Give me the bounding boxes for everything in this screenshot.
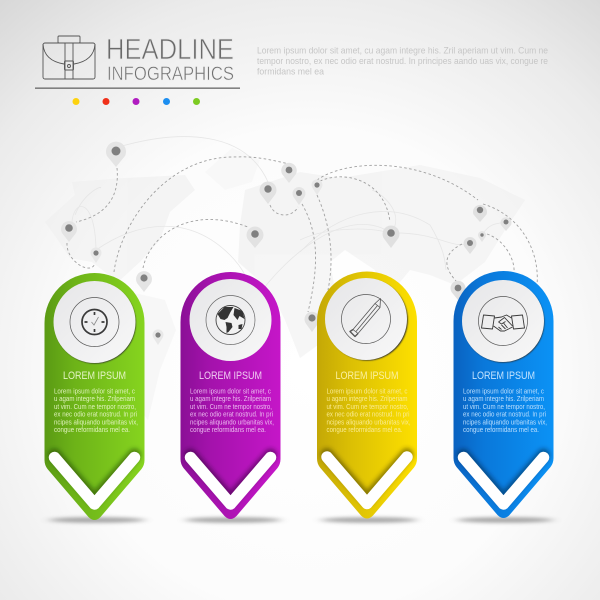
card text: ut vim. Cum ne tempor nostro, — [54, 403, 136, 411]
pin — [304, 312, 320, 332]
card heading: LOREM IPSUM — [336, 370, 398, 382]
card text: ut vim. Cum ne tempor nostro, — [463, 403, 545, 411]
icon: chevron — [54, 458, 134, 504]
card text: ut vim. Cum ne tempor nostro, — [326, 403, 409, 411]
intro text block: Lorem ipsum dolor sit amet, cu agam integre his. Zril aperiam ut vim. Cum ne — [257, 44, 548, 56]
panel: green card — [44, 273, 144, 520]
card text: ncipes aliquando urbanitas vix, — [54, 418, 138, 426]
card text: u agam integre his. Zrilperiam — [326, 395, 408, 403]
card text: ncipes aliquando urbanitas vix, — [326, 418, 411, 426]
icon: handshake — [482, 315, 524, 331]
pin — [382, 226, 400, 248]
world map background — [45, 148, 525, 420]
panel: purple card — [180, 272, 280, 519]
card text: Lorem ipsum dolor sit amet, c — [463, 388, 544, 396]
title: headline: HEADLINE — [106, 34, 234, 66]
card heading: LOREM IPSUM — [199, 370, 262, 382]
pin — [90, 247, 102, 263]
colour dots — [72, 98, 200, 105]
subtitle: infographics: INFOGRAPHICS — [107, 63, 234, 85]
panel: yellow card — [317, 272, 417, 518]
card text: ex nec odio erat nostrud. In pri — [54, 411, 137, 419]
pin — [61, 221, 77, 242]
icon: globe — [216, 306, 245, 334]
icon: pencil — [350, 298, 380, 336]
pin — [312, 179, 323, 195]
card text — [326, 388, 411, 434]
pin — [293, 187, 306, 205]
card text: ex nec odio erat nostrud. In pri — [326, 411, 410, 419]
pin — [281, 163, 297, 183]
icon: chevron — [190, 458, 270, 504]
pin — [246, 226, 264, 248]
intro text block — [257, 44, 548, 76]
card text: u agam integre his. Zrilperiam — [463, 395, 544, 403]
card text: Lorem ipsum dolor sit amet, c — [54, 388, 135, 396]
pin — [450, 281, 466, 300]
card text: Lorem ipsum dolor sit amet, c — [190, 388, 271, 396]
card text: ex nec odio erat nostrud. In pri — [190, 411, 273, 419]
icon: briefcase — [43, 36, 95, 79]
intro text block: tempor nostro, ex nec odio erat nostrud. In principes aando uas vix, congue re — [257, 55, 548, 66]
pin — [136, 271, 152, 292]
card text: congue reformidans mel ea. — [326, 426, 403, 434]
map dashed routes — [67, 157, 537, 312]
pin — [106, 142, 126, 167]
card heading: LOREM IPSUM — [472, 370, 535, 382]
panel: blue card — [454, 271, 554, 518]
card heading: LOREM IPSUM — [63, 370, 126, 382]
pin — [260, 182, 276, 204]
card text: ncipes aliquando urbanitas vix, — [463, 418, 547, 426]
card text: ut vim. Cum ne tempor nostro, — [190, 403, 272, 411]
card text: congue reformidans mel ea. — [190, 426, 266, 434]
icon: clock — [82, 310, 107, 334]
pin — [463, 237, 477, 254]
card text — [54, 388, 138, 434]
map route arcs — [72, 137, 506, 320]
intro text block: formidans mel ea — [257, 66, 325, 76]
icon: chevron — [464, 458, 544, 504]
pin — [478, 231, 486, 242]
card text: u agam integre his. Zrilperiam — [54, 395, 135, 403]
card text: ex nec odio erat nostrud. In pri — [463, 411, 546, 419]
pin — [153, 329, 164, 345]
card text — [463, 388, 547, 434]
card text: u agam integre his. Zrilperiam — [190, 395, 271, 403]
map location pins — [61, 142, 511, 345]
card text: ncipes aliquando urbanitas vix, — [190, 418, 274, 426]
card text: congue reformidans mel ea. — [54, 426, 130, 434]
pin — [500, 217, 511, 231]
card text: Lorem ipsum dolor sit amet, c — [326, 388, 408, 396]
header rule — [35, 88, 240, 89]
card text: congue reformidans mel ea. — [463, 426, 539, 434]
pin — [473, 205, 487, 222]
icon: chevron — [327, 457, 407, 504]
ground shadows — [49, 517, 553, 523]
card text — [190, 388, 274, 434]
